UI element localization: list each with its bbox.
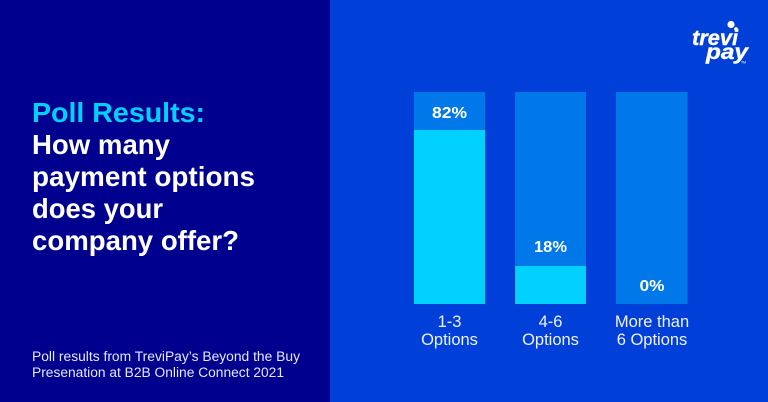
category label: 4-6	[539, 313, 562, 331]
logo trademark: TM	[741, 60, 746, 64]
bar chart	[414, 92, 689, 349]
heading accent: Poll Results: Poll Results:	[32, 97, 205, 128]
question line 2: payment options	[32, 161, 255, 192]
source note	[32, 349, 300, 380]
bar group: 1-3 options	[414, 92, 485, 349]
bar track	[515, 92, 586, 304]
logo small dot	[734, 27, 738, 31]
heading: poll question	[32, 97, 255, 256]
bar group: 4-6 options	[515, 92, 586, 349]
source line 2: Presenation at B2B Online Connect 2021	[32, 365, 284, 380]
bar value fill	[515, 266, 586, 304]
logo large dot	[727, 21, 735, 28]
panel: chart background	[330, 0, 768, 402]
value label: 18%	[534, 239, 567, 256]
bar track	[616, 92, 688, 304]
bar track	[414, 92, 485, 304]
category label: 1-3	[438, 313, 461, 331]
category label: Options	[421, 331, 478, 349]
question line 1: How many	[32, 129, 170, 160]
logo word: trevi: trevi	[692, 26, 739, 50]
logo: TreviPay	[692, 21, 749, 64]
question line 3: does your	[32, 193, 163, 224]
category label: Options	[522, 331, 579, 349]
bar group: more than 6 options	[615, 92, 689, 349]
question line 4: company offer?	[32, 225, 239, 256]
source line 1: Poll results from TreviPay’s Beyond the Buy	[32, 349, 300, 364]
logo word: pay: pay	[705, 40, 749, 64]
panel: left background	[0, 0, 330, 402]
category label: 6 Options	[617, 331, 687, 349]
category label: More than	[615, 313, 689, 331]
value label: 82%	[432, 105, 467, 122]
bar value fill	[414, 130, 485, 304]
value label: 0%	[640, 278, 665, 295]
